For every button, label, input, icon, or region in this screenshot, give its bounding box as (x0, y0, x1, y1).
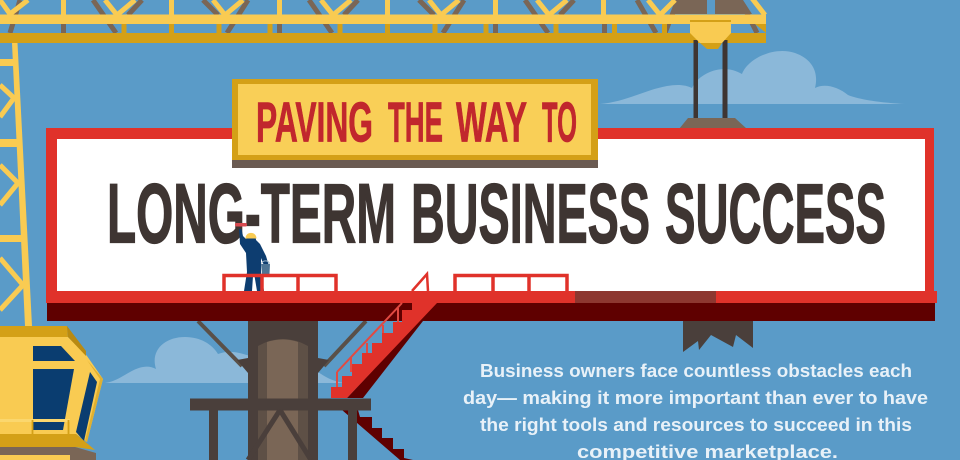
intro paragraph: Business owners face countless obstacles each (480, 360, 912, 381)
banner: paving the way to: TO (542, 91, 577, 155)
billboard title text: LONG-TERM (107, 166, 396, 260)
billboard title text: BUSINESS (411, 166, 650, 260)
lower stairs (342, 410, 413, 460)
crane: hook block (690, 20, 731, 49)
intro paragraph: the right tools and resources to succeed in this (480, 414, 912, 435)
banner: paving the way to (232, 79, 598, 168)
crane: cables (694, 40, 728, 122)
ledge (46, 291, 937, 321)
left guard rail (224, 276, 336, 291)
intro paragraph: day— making it more important than ever to have (463, 387, 928, 408)
worker (235, 223, 270, 291)
crane: vertical tower (0, 43, 32, 326)
crane cabin (0, 326, 103, 460)
intro paragraph (463, 360, 928, 460)
billboard title text (107, 166, 886, 260)
cloud: lower left (105, 337, 345, 383)
banner: paving the way to: THE (388, 91, 443, 155)
banner: paving the way to: PAVING (256, 91, 373, 155)
broken board hanging piece (683, 321, 753, 352)
right guard rail (455, 276, 567, 291)
billboard (46, 128, 934, 298)
crane: trolley (672, 0, 752, 14)
platform scaffold (190, 398, 371, 460)
crane: horizontal jib (0, 0, 766, 43)
billboard base on top (679, 118, 747, 129)
cloud: upper right (600, 51, 905, 104)
staircase (331, 274, 450, 398)
banner: paving the way to: WAY (456, 91, 527, 155)
support column (248, 318, 318, 460)
diagonal struts (198, 321, 366, 373)
